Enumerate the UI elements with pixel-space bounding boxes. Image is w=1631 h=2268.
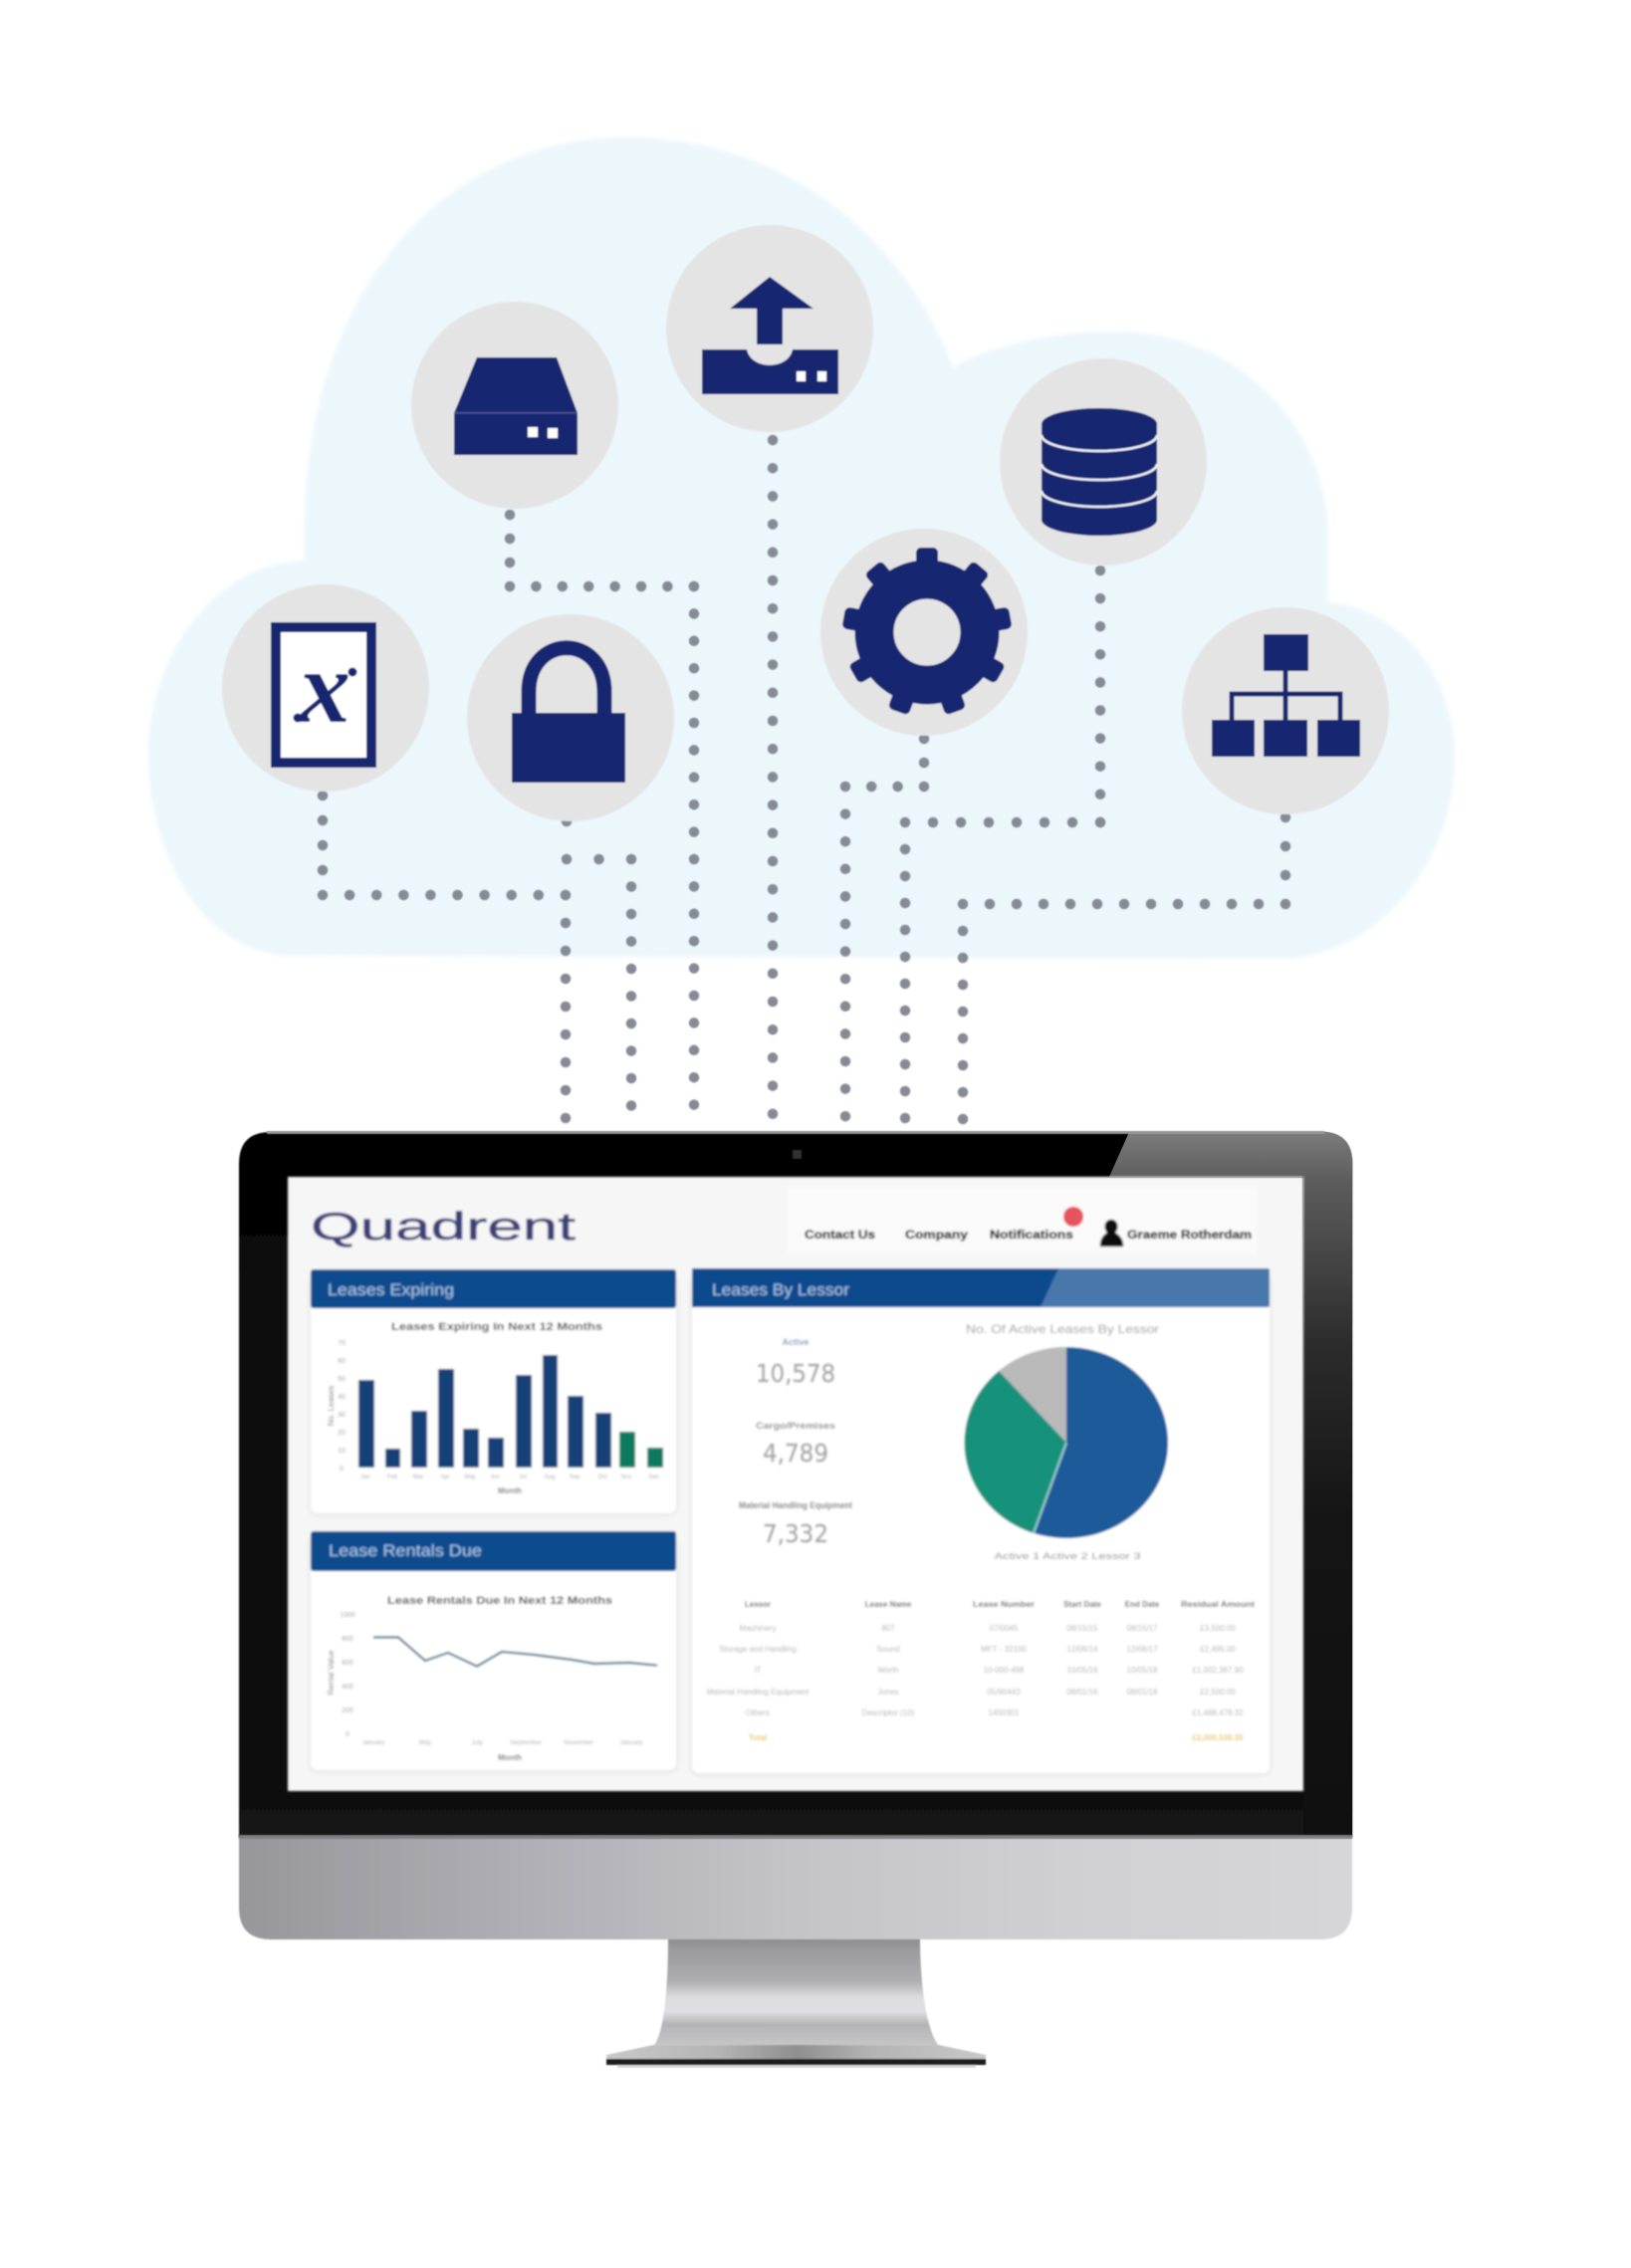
table row: 10/05/16 xyxy=(1066,1666,1098,1675)
line chart: 800 xyxy=(342,1636,353,1643)
table row: 10/05/18 xyxy=(1126,1666,1158,1675)
panel: lease rentals due xyxy=(311,1531,676,1770)
panel heading: Leases By Lessor xyxy=(712,1280,849,1299)
nav strip xyxy=(787,1187,1257,1254)
line chart: July xyxy=(471,1739,484,1746)
table row: 08/15/15 xyxy=(1066,1624,1098,1633)
table total: Total xyxy=(749,1733,767,1742)
navigation xyxy=(805,1207,1252,1247)
table total: £2,000,538.35 xyxy=(1192,1733,1244,1742)
table header: Lease Name xyxy=(865,1600,912,1609)
card xyxy=(311,1274,676,1513)
bar chart: May xyxy=(464,1474,476,1480)
icon: database xyxy=(1000,358,1207,566)
panel: leases by lessor xyxy=(692,1268,1270,1773)
table header: Lessor xyxy=(745,1600,771,1609)
panel header xyxy=(311,1531,676,1571)
line chart xyxy=(327,1612,657,1762)
line chart: May xyxy=(419,1739,432,1746)
bar chart: Month xyxy=(498,1486,522,1495)
icon: network hierarchy xyxy=(1182,607,1389,814)
top edge highlight xyxy=(267,1131,1324,1134)
bar chart: Sep xyxy=(570,1474,581,1480)
nav: notifications: Notifications xyxy=(990,1230,1073,1242)
icon: spreadsheet file: x xyxy=(297,630,350,745)
table row: 05/90443 xyxy=(987,1688,1021,1697)
table row: Descriptor (10) xyxy=(862,1708,915,1717)
table row: 1450301 xyxy=(988,1708,1020,1717)
table row: MFT - 32100 xyxy=(981,1645,1027,1654)
panel header xyxy=(692,1268,1270,1307)
bar chart: Oct xyxy=(597,1474,607,1480)
kpi: active: 10,578 xyxy=(756,1359,835,1388)
connector: database to monitor xyxy=(905,570,1100,1123)
table row: Sound xyxy=(876,1645,900,1654)
table row xyxy=(746,1708,1244,1717)
kpi: material handling: Material Handling Equipment xyxy=(739,1500,852,1510)
kpi: cargo premises: 4,789 xyxy=(763,1439,828,1468)
logo: Quadrent xyxy=(311,1206,576,1248)
table header: End Date xyxy=(1125,1600,1160,1609)
table row: Storage and Handling xyxy=(719,1645,797,1654)
table row: 12/06/14 xyxy=(1066,1645,1098,1654)
panel heading: Lease Rentals Due xyxy=(329,1541,482,1560)
kpi: active xyxy=(756,1337,835,1388)
monitor xyxy=(239,1131,1352,2068)
nav: company: Company xyxy=(905,1230,969,1242)
table total xyxy=(749,1733,1244,1742)
bar chart: 60 xyxy=(338,1358,346,1365)
table row: £1,488,478.32 xyxy=(1192,1708,1244,1717)
table row xyxy=(740,1624,1236,1633)
line chart: Rental Value xyxy=(327,1650,336,1696)
connector: drive to monitor xyxy=(510,515,694,1129)
line chart: 400 xyxy=(342,1684,353,1691)
cloud icons xyxy=(222,225,1389,821)
pie legend: Active 1 Active 2 Lessor 3 xyxy=(994,1551,1141,1561)
table header xyxy=(745,1600,1255,1609)
kpi: material handling: 7,332 xyxy=(763,1519,828,1548)
notification badge xyxy=(1063,1207,1083,1227)
bar chart: 0 xyxy=(340,1466,344,1473)
bar chart: Mar xyxy=(413,1474,423,1480)
icon: spreadsheet file xyxy=(222,584,429,792)
chart title: Lease Rentals Due In Next 12 Months xyxy=(387,1595,612,1607)
stand neck xyxy=(653,1937,939,2046)
table row: £2,500.00 xyxy=(1200,1688,1236,1697)
line chart: January xyxy=(361,1739,385,1746)
bar chart: Jul xyxy=(519,1474,527,1480)
icon: padlock xyxy=(467,614,674,821)
table header: Residual Amount xyxy=(1181,1600,1255,1609)
kpi: cargo premises: Cargo/Premises xyxy=(756,1421,835,1431)
kpi: active: Active xyxy=(782,1337,810,1347)
bar chart: 40 xyxy=(338,1394,346,1401)
screen background xyxy=(288,1177,1303,1791)
dotted connector lines xyxy=(323,440,1285,1129)
table row: 07/0045 xyxy=(990,1624,1019,1633)
table row: 10-000-498 xyxy=(984,1666,1025,1675)
line chart: September xyxy=(510,1739,543,1746)
bar chart: 50 xyxy=(338,1376,346,1383)
line chart: 200 xyxy=(342,1707,353,1714)
chin xyxy=(239,1835,1352,1939)
table row xyxy=(754,1666,1244,1675)
table row: £2,495.00 xyxy=(1200,1645,1236,1654)
bar chart: 30 xyxy=(338,1412,346,1419)
table row xyxy=(707,1688,1236,1697)
line chart: January xyxy=(619,1739,643,1746)
connector: network to monitor xyxy=(963,817,1285,1123)
panel heading: Leases Expiring xyxy=(328,1280,454,1299)
table row: Worth xyxy=(877,1666,899,1675)
table row: Material Handling Equipment xyxy=(707,1688,810,1697)
panel header xyxy=(311,1269,676,1308)
panel: leases expiring xyxy=(311,1269,676,1513)
bar chart: Dec xyxy=(649,1474,659,1480)
stand base xyxy=(606,2045,986,2068)
table row: Others xyxy=(746,1708,770,1717)
chart title: Leases Expiring In Next 12 Months xyxy=(391,1321,602,1333)
bar chart: Jun xyxy=(490,1474,500,1480)
connector: gear to monitor xyxy=(845,739,924,1123)
table row: Jones xyxy=(877,1688,899,1697)
table row: 12/06/17 xyxy=(1126,1645,1158,1654)
table header: Start Date xyxy=(1063,1600,1101,1609)
line chart: 1000 xyxy=(340,1612,355,1619)
nav: contact us: Contact Us xyxy=(805,1230,875,1242)
card xyxy=(311,1535,676,1770)
connector: file icon to monitor xyxy=(323,795,566,1125)
connector: upload to monitor xyxy=(768,440,778,1123)
chin top shadow xyxy=(239,1835,1352,1839)
table header: Lease Number xyxy=(973,1600,1035,1609)
bar chart: Nov xyxy=(621,1474,631,1480)
table row xyxy=(719,1645,1236,1654)
table row: 08/15/17 xyxy=(1126,1624,1158,1633)
bar chart xyxy=(327,1340,663,1495)
icon: user xyxy=(1100,1220,1123,1247)
line chart: 0 xyxy=(346,1731,350,1738)
bar chart: Jan xyxy=(360,1474,370,1480)
bar chart: 10 xyxy=(338,1448,346,1455)
leases table xyxy=(707,1600,1255,1742)
icon: gear xyxy=(820,529,1028,736)
pie chart xyxy=(964,1347,1168,1538)
line chart: November xyxy=(564,1739,594,1746)
bar chart: No. Leases xyxy=(327,1386,336,1426)
infographic canvas xyxy=(147,137,1456,2069)
line chart: 600 xyxy=(342,1660,353,1667)
table row: IT xyxy=(754,1666,762,1675)
table row: £1,002,367.90 xyxy=(1192,1666,1244,1675)
card xyxy=(692,1274,1270,1773)
nav: user name: Graeme Rotherdam xyxy=(1127,1230,1252,1242)
bar chart: 70 xyxy=(338,1340,346,1347)
icon: upload to drive xyxy=(666,225,873,432)
line chart: Month xyxy=(498,1753,522,1762)
bar chart: Apr xyxy=(440,1474,450,1480)
table row: 08/01/18 xyxy=(1126,1688,1158,1697)
bar chart: Feb xyxy=(387,1474,398,1480)
kpi: material handling xyxy=(739,1500,852,1548)
bezel glare xyxy=(1109,1132,1352,1835)
chart title: No. Of Active Leases By Lessor xyxy=(966,1322,1159,1336)
icon: hard drive xyxy=(411,302,618,509)
table row: Machinery xyxy=(740,1624,776,1633)
table row: 08/01/16 xyxy=(1066,1688,1098,1697)
table row: £3,500.00 xyxy=(1200,1624,1236,1633)
kpi: cargo premises xyxy=(756,1421,835,1468)
bar chart: 20 xyxy=(338,1430,346,1437)
bezel xyxy=(239,1132,1352,1837)
connector: lock to monitor xyxy=(567,821,631,1129)
camera xyxy=(793,1150,802,1159)
table row: 807 xyxy=(881,1624,895,1633)
dashboard screen xyxy=(288,1177,1303,1791)
bar chart: Aug xyxy=(545,1474,555,1480)
cloud background xyxy=(148,137,1455,959)
